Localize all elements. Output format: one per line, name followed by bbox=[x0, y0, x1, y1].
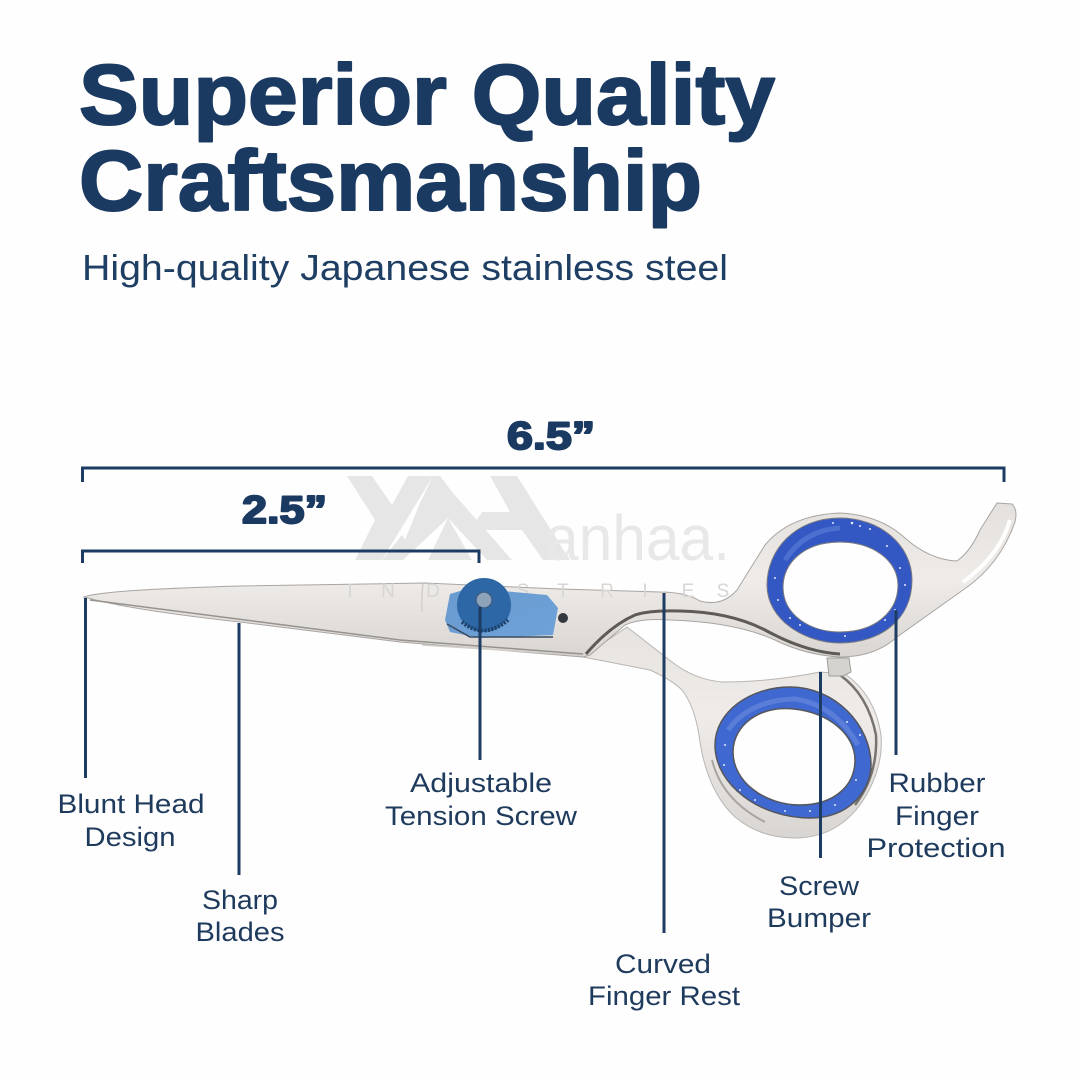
callout: rubber finger protection: Rubber bbox=[888, 768, 986, 798]
callout: rubber finger protection bbox=[866, 610, 1006, 863]
watermark: industries: INDUSTRIES bbox=[347, 581, 729, 602]
upper blade and handle with finger rest bbox=[84, 503, 1016, 657]
callout: sharp blades: Blades bbox=[196, 917, 284, 947]
callout: blunt head design: Design bbox=[84, 822, 176, 852]
callout: adjustable tension screw bbox=[385, 607, 578, 831]
upper rubber ring bbox=[767, 518, 912, 643]
callout: curved finger rest: Curved bbox=[615, 949, 711, 979]
callout: blunt head design: Blunt Head bbox=[58, 789, 204, 819]
callout: adjustable tension screw: Tension Screw bbox=[385, 801, 578, 831]
handle shadows bbox=[586, 611, 840, 654]
callout: blunt head design bbox=[58, 598, 204, 852]
title: Superior Quality bbox=[79, 48, 775, 143]
callout: rubber finger protection: Protection bbox=[866, 833, 1006, 863]
title bbox=[79, 48, 775, 229]
watermark: logo bbox=[347, 476, 730, 574]
icon: screw bumper bbox=[827, 658, 851, 676]
blade edge line bbox=[90, 600, 583, 654]
callout: curved finger rest bbox=[588, 593, 741, 1011]
dimension: 2.5 inch bbox=[82, 489, 479, 563]
scissors bbox=[84, 503, 1016, 838]
dimension: 2.5 inch: 2.5” bbox=[242, 489, 327, 532]
dimension: 6.5 inch bbox=[82, 415, 1004, 482]
dimension: 6.5 inch: 6.5” bbox=[507, 415, 595, 458]
subtitle: High-quality Japanese stainless steel bbox=[82, 247, 728, 288]
callout: screw bumper bbox=[767, 672, 871, 933]
adjustable tension screw bbox=[445, 578, 568, 638]
lower blade and finger handle bbox=[84, 597, 881, 838]
callout: sharp blades: Sharp bbox=[202, 885, 278, 915]
watermark: logo: anhaa. bbox=[545, 502, 730, 574]
lower rubber ring bbox=[715, 687, 871, 818]
callout: curved finger rest: Finger Rest bbox=[588, 981, 741, 1011]
callout: sharp blades bbox=[196, 623, 284, 947]
callout: screw bumper: Screw bbox=[779, 871, 860, 901]
callout: rubber finger protection: Finger bbox=[895, 801, 979, 831]
callout: adjustable tension screw: Adjustable bbox=[410, 768, 552, 798]
title: Craftsmanship bbox=[79, 134, 702, 229]
callout: screw bumper: Bumper bbox=[767, 903, 871, 933]
blade hinge step bbox=[422, 584, 580, 655]
